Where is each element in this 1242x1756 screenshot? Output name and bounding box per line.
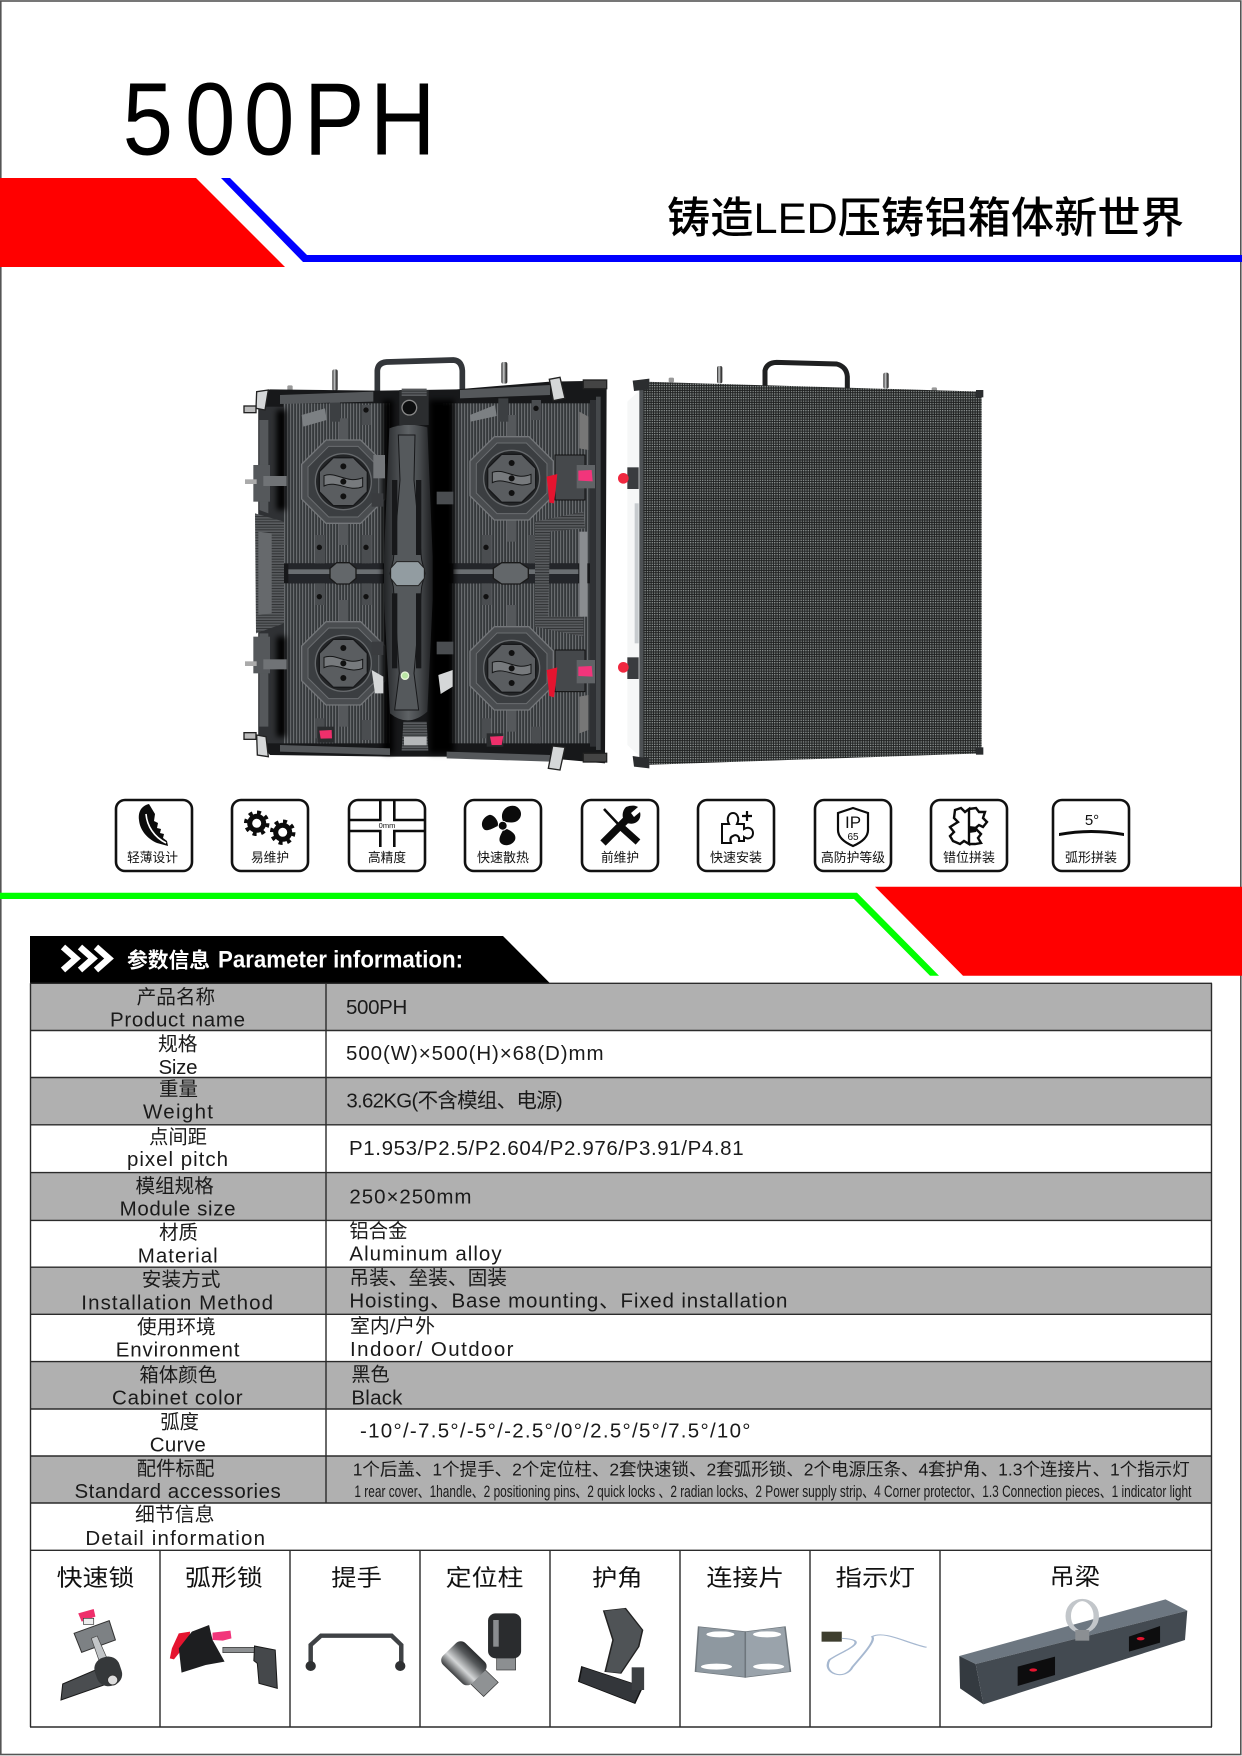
row: curve: Curve — [150, 1434, 206, 1457]
icon: puzzle quick install: 快速安装 — [710, 850, 762, 865]
accessory titles: 护角 — [592, 1564, 643, 1590]
row: weight — [143, 1078, 563, 1123]
row: product name: Product name — [110, 1009, 245, 1032]
row: installation method — [81, 1268, 787, 1314]
bottom pink latches — [317, 727, 503, 747]
row: curve: -10°/-7.5°/-5°/-2.5°/0°/2.5°/5°/7.5°/10° — [360, 1420, 750, 1443]
icon: feather — [116, 800, 192, 871]
positioning pins part — [438, 1613, 521, 1700]
quick lock — [61, 1609, 125, 1700]
indicator light — [401, 672, 409, 679]
row: size: 500(W)×500(H)×68(D)mm — [346, 1042, 604, 1065]
row: curve: 弧度 — [160, 1412, 199, 1434]
side rails — [259, 385, 601, 762]
right handle — [535, 512, 587, 637]
row: environment — [116, 1316, 514, 1362]
row: detail information — [85, 1504, 265, 1550]
icon: wrench and screwdriver — [582, 800, 658, 871]
icon: fan: 快速散热 — [477, 850, 529, 865]
row: size: Size — [158, 1056, 198, 1079]
icon: 5 degree arc — [1053, 800, 1129, 871]
row: detail information: 细节信息 — [135, 1504, 214, 1526]
centre spine — [372, 389, 453, 751]
row: weight: 重量 — [159, 1078, 198, 1100]
back quadrants with ribs — [283, 403, 590, 743]
subtitle: 铸造LED压铸铝箱体新世界 — [667, 195, 1184, 243]
accessory titles — [57, 1564, 1100, 1590]
side locks left — [245, 465, 287, 673]
moire bands — [643, 382, 982, 765]
front handle — [765, 362, 847, 388]
row: curve — [150, 1412, 750, 1457]
side brackets — [627, 387, 644, 763]
icon: 0mm seam: 高精度 — [368, 850, 406, 865]
icon: IP65 shield: 高防护等级 — [821, 850, 885, 865]
header band: red block and blue rule — [0, 178, 1242, 267]
row: installation method: 安装方式 — [142, 1269, 220, 1291]
handle part — [306, 1636, 405, 1671]
icon: wrench and screwdriver: 前维护 — [601, 850, 639, 865]
product photo: LED front view — [618, 362, 983, 768]
icon: 5 degree arc: 5° — [1085, 812, 1099, 829]
icon: IP65 shield: IP — [845, 813, 861, 832]
icon: staggered puzzle — [931, 800, 1007, 871]
front corners — [633, 379, 983, 768]
row: detail information: Detail information — [85, 1527, 265, 1550]
spine shadows — [277, 400, 454, 753]
corner protector — [579, 1608, 644, 1703]
section header: parameter information — [30, 936, 550, 983]
row: environment: 室内/户外 — [350, 1316, 435, 1338]
screws — [317, 406, 539, 599]
accessory photos: last four — [579, 1599, 1187, 1704]
right locks with pink latches — [547, 455, 595, 697]
hanging beam — [959, 1599, 1187, 1704]
LED surface — [643, 382, 982, 765]
cabinet frame — [258, 381, 607, 763]
row: cabinet color: Cabinet color — [112, 1386, 243, 1409]
icon: IP65 shield: 65 — [847, 832, 859, 843]
section heading text: Parameter information: — [218, 946, 463, 974]
row: standard accessories: 1个后盖、1个提手、2个定位柱、2套快速锁、2套弧形锁、2个电源压条、4套护角、1.3个连接片、1个指示灯 — [353, 1460, 1190, 1480]
row: pixel pitch: pixel pitch — [127, 1148, 228, 1171]
left handle — [255, 513, 284, 633]
arc lock — [170, 1625, 277, 1688]
side column fill — [258, 400, 600, 747]
positioning pins on top — [287, 362, 507, 392]
row: weight: 3.62KG(不含模组、电源) — [346, 1090, 563, 1113]
accessory titles: 指示灯 — [836, 1564, 915, 1590]
row: environment: 使用环境 — [137, 1316, 216, 1338]
icon: puzzle quick install — [698, 800, 774, 871]
icon: staggered puzzle: 错位拼装 — [943, 850, 995, 865]
row: environment: Environment — [116, 1339, 240, 1362]
lower band: green rule and red block — [0, 887, 1242, 976]
row: pixel pitch — [127, 1126, 744, 1171]
row: product name — [110, 986, 407, 1032]
row: environment: Indoor/ Outdoor — [350, 1338, 514, 1361]
row: material: Aluminum alloy — [349, 1243, 502, 1266]
indicator cable — [822, 1632, 927, 1675]
row: cabinet color: 黑色 — [351, 1364, 390, 1386]
accessory titles: 提手 — [331, 1564, 382, 1590]
product photo: cabinet back view — [244, 360, 607, 770]
section heading text — [127, 946, 463, 974]
accessory titles: 快速锁 — [57, 1564, 134, 1590]
row: product name: 产品名称 — [137, 986, 215, 1008]
feature icons row — [116, 800, 1129, 871]
row: size: 规格 — [158, 1034, 198, 1056]
row: material: 材质 — [159, 1222, 198, 1244]
row: pixel pitch: 点间距 — [149, 1126, 207, 1148]
accessory titles: 弧形锁 — [185, 1564, 263, 1590]
connection plate — [695, 1627, 790, 1677]
row: cabinet color: 箱体颜色 — [139, 1364, 217, 1386]
accessory photos: first four — [61, 1609, 521, 1700]
row: module size: 模组规格 — [136, 1176, 214, 1198]
row: installation method: Hoisting、Base mounting、Fixed installation — [349, 1289, 787, 1312]
row: installation method: 吊装、垒装、固装 — [349, 1268, 507, 1290]
icon: gears — [232, 800, 308, 871]
row: pixel pitch: P1.953/P2.5/P2.604/P2.976/P3.91/P4.81 — [349, 1137, 744, 1160]
icon: fan — [465, 800, 541, 871]
parameter table — [30, 983, 1212, 1727]
front red locks — [618, 467, 639, 679]
accessory titles: 连接片 — [706, 1564, 784, 1590]
icon: feather: 轻薄设计 — [127, 850, 178, 865]
row: standard accessories — [74, 1458, 1192, 1503]
icon: 0mm seam — [349, 800, 425, 871]
accessory titles: 定位柱 — [446, 1564, 524, 1590]
row: size — [158, 1034, 604, 1079]
icon: gears: 易维护 — [251, 850, 289, 865]
horizontal braces — [288, 563, 578, 584]
handle on top of cabinet — [377, 360, 462, 395]
grey row backgrounds — [30, 983, 1212, 1503]
icon: 5 degree arc: 弧形拼装 — [1065, 850, 1117, 865]
icon: 0mm seam: 0mm — [379, 821, 395, 830]
row: material: Material — [138, 1245, 218, 1268]
section heading text: 参数信息 — [127, 948, 210, 972]
row: module size: Module size — [120, 1198, 236, 1221]
row: weight: Weight — [143, 1100, 213, 1123]
row: cabinet color: Black — [351, 1386, 403, 1409]
title: 500PH: 500PH — [123, 61, 435, 177]
row: module size: 250×250mm — [349, 1185, 472, 1208]
row: product name: 500PH — [346, 996, 407, 1019]
row: material: 铝合金 — [349, 1220, 408, 1242]
row: standard accessories: Standard accessories — [74, 1480, 281, 1503]
accessory titles: 吊梁 — [1050, 1564, 1100, 1590]
corner brackets — [244, 377, 607, 770]
row: material — [138, 1220, 502, 1268]
row: installation method: Installation Method — [81, 1291, 273, 1314]
icon: IP65 shield — [815, 800, 891, 871]
medallions — [302, 415, 553, 732]
front pins — [669, 366, 937, 391]
chevrons — [63, 947, 109, 970]
row: module size — [120, 1176, 471, 1221]
mounting blocks with screws — [302, 398, 541, 743]
row: cabinet color — [112, 1364, 403, 1409]
row: standard accessories: 配件标配 — [137, 1458, 214, 1480]
